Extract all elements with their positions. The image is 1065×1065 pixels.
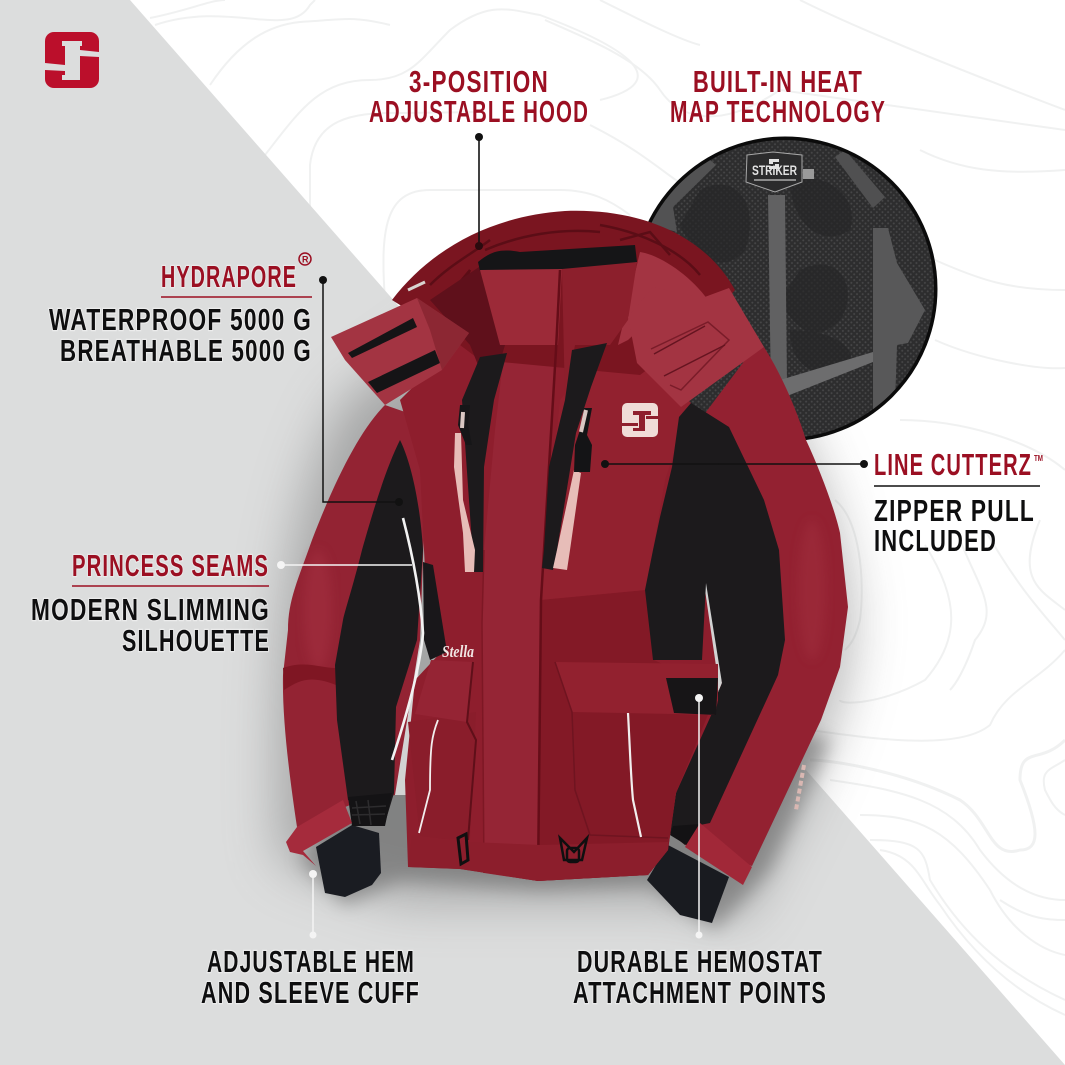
right black cuff — [647, 845, 729, 923]
left torso black strip — [423, 562, 447, 660]
embroidered name: Stella — [442, 642, 474, 661]
left sleeve crease — [283, 664, 336, 690]
callout: line cutterz: TM — [1034, 454, 1043, 463]
center facing strip — [768, 195, 787, 395]
callout: adjustable hem and sleeve cuff: ADJUSTABLE HEM — [207, 944, 415, 979]
right facing strip — [873, 228, 925, 415]
center zipper line — [538, 270, 560, 881]
hood back — [392, 211, 735, 375]
callout: princess seams — [31, 548, 412, 658]
callout: built-in heat map technology: BUILT-IN HEAT — [693, 64, 863, 99]
zipper pulls — [458, 405, 592, 472]
collar right panel — [562, 262, 637, 400]
left sleeve black panel — [335, 440, 423, 823]
left sleeve highlight — [304, 550, 332, 670]
chest logo — [622, 403, 658, 437]
left sleeve fold — [286, 800, 352, 866]
jacket soft shadow — [278, 290, 851, 930]
left chest black strip — [462, 353, 507, 572]
callout: adjustable hem and sleeve cuff — [201, 870, 420, 1010]
left sleeve — [283, 405, 428, 827]
right sleeve highlight — [798, 520, 826, 660]
neck label: STRIKER — [752, 163, 797, 178]
callout: built-in heat map technology: MAP TECHNOLOGY — [670, 94, 886, 129]
right pocket — [555, 662, 718, 838]
right hood visor — [628, 287, 764, 407]
placket — [480, 268, 562, 881]
left elastic cuff gather — [348, 793, 392, 826]
callout: 3-position adjustable hood: 3-POSITION — [409, 64, 549, 99]
lining side panels — [652, 160, 716, 232]
carabiner attachment — [458, 834, 468, 864]
right chest shoulder — [540, 350, 691, 600]
callout: built-in heat map technology — [670, 64, 886, 129]
jacket illustration — [283, 211, 848, 923]
princess seam white line — [392, 518, 423, 760]
left black cuff — [316, 825, 381, 897]
right sleeve black panel — [665, 403, 785, 845]
right chest black strip — [542, 343, 607, 570]
callout: 3-position adjustable hood: ADJUSTABLE HOOD — [369, 94, 589, 129]
callout: hydrapore: HYDRAPORE — [161, 259, 297, 294]
logo: Striker S — [45, 32, 99, 88]
neck label — [746, 152, 814, 192]
black neck fleece — [478, 245, 637, 271]
right pink zipper — [553, 470, 581, 570]
torso — [400, 335, 718, 881]
callout: durable hemostat attachment points: DURABLE HEMOSTAT — [577, 944, 823, 979]
left pink zipper — [454, 433, 475, 572]
hem band — [408, 835, 668, 881]
hood fur wrinkles — [430, 225, 700, 300]
hood inner left — [430, 265, 505, 395]
collar left panel — [480, 269, 562, 345]
left pocket — [408, 660, 476, 840]
right sleeve — [670, 347, 848, 866]
left hood visor — [331, 282, 469, 405]
callout: durable hemostat attachment points — [573, 694, 827, 1010]
arm gaps light fill — [392, 640, 420, 795]
callout: princess seams: PRINCESS SEAMS — [72, 548, 269, 583]
callout: hydrapore: BREATHABLE 5000 G — [60, 333, 312, 368]
D-ring attachment — [560, 838, 587, 862]
callout: adjustable hem and sleeve cuff: AND SLEEVE CUFF — [201, 975, 420, 1010]
callout: princess seams: SILHOUETTE — [122, 623, 270, 658]
callout: hydrapore: R — [302, 254, 309, 264]
callout: line cutterz: INCLUDED — [874, 523, 997, 558]
callout: hydrapore — [49, 253, 403, 506]
hood inner right lining — [618, 252, 708, 345]
inset circle: heat map lining — [648, 136, 938, 440]
right torso black panel — [645, 403, 725, 660]
callout: princess seams: MODERN SLIMMING — [31, 592, 270, 627]
callout: line cutterz — [601, 447, 1043, 558]
callout: hydrapore: WATERPROOF 5000 G — [49, 302, 312, 337]
camouflage blotches — [680, 178, 852, 369]
callout: 3-position adjustable hood — [369, 64, 589, 250]
right sleeve fold — [685, 823, 752, 885]
right sleeve elastic — [670, 824, 700, 846]
right torso lower shade — [538, 590, 718, 881]
callout: durable hemostat attachment points: ATTACHMENT POINTS — [573, 975, 827, 1010]
